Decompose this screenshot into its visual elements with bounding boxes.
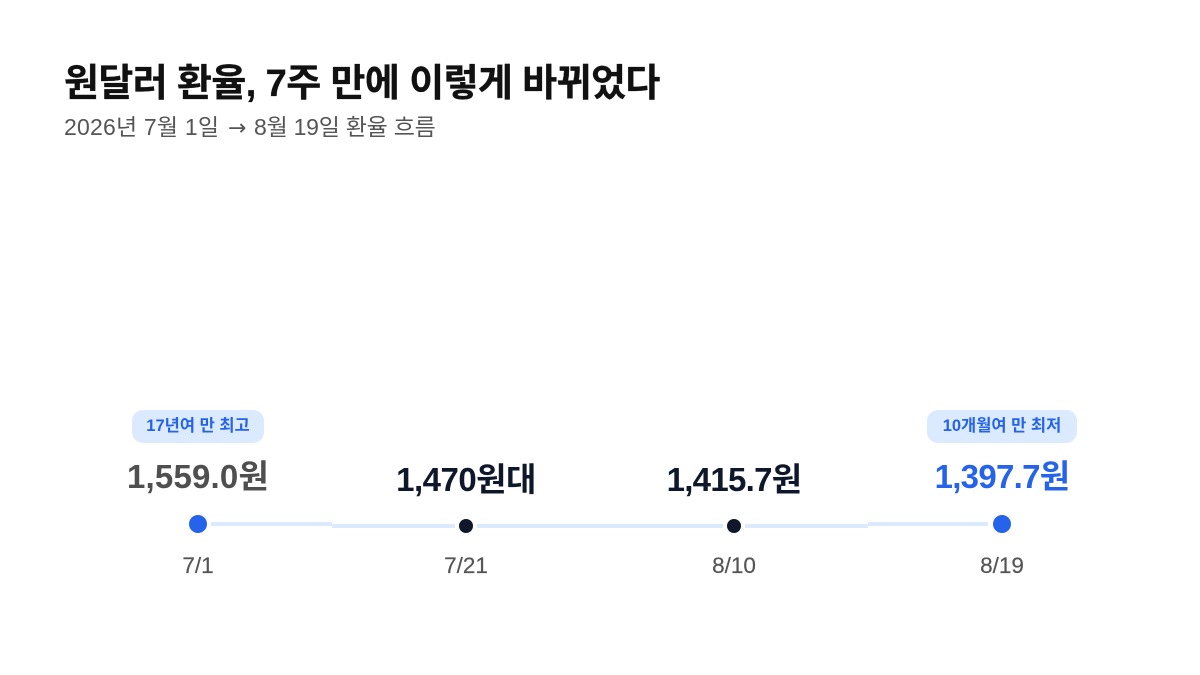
connector line (211, 522, 988, 528)
point: 7/21 date: 7/21 (444, 553, 488, 578)
point: 7/1 badge: 17년여 만 최고 (146, 417, 250, 435)
point: 7/21 dot (459, 519, 473, 533)
timeline chart (127, 410, 1077, 578)
point: 8/19 value: 1,397.7원 (935, 458, 1069, 495)
point: 8/10 date: 8/10 (712, 553, 756, 578)
point: 7/1 value: 1,559.0원 (127, 458, 269, 495)
point: 8/19 badge: 10개월여 만 최저 (943, 417, 1061, 435)
subtitle: 2026년 7월 1일 → 8월 19일 환율 흐름 (64, 114, 436, 141)
point: 8/10 value: 1,415.7원 (667, 461, 801, 498)
point: 8/19 date: 8/19 (980, 553, 1024, 578)
point: 7/1 badge (132, 410, 264, 443)
title: 원달러 환율, 7주 만에 이렇게 바뀌었다 (64, 63, 660, 105)
point: 8/10 dot (727, 519, 741, 533)
point: 8/19 dot (993, 515, 1011, 533)
point: 8/19 badge (927, 410, 1077, 443)
point: 7/1 date: 7/1 (182, 553, 214, 578)
point: 7/1 dot (189, 515, 207, 533)
point: 7/21 value: 1,470원대 (396, 461, 536, 498)
